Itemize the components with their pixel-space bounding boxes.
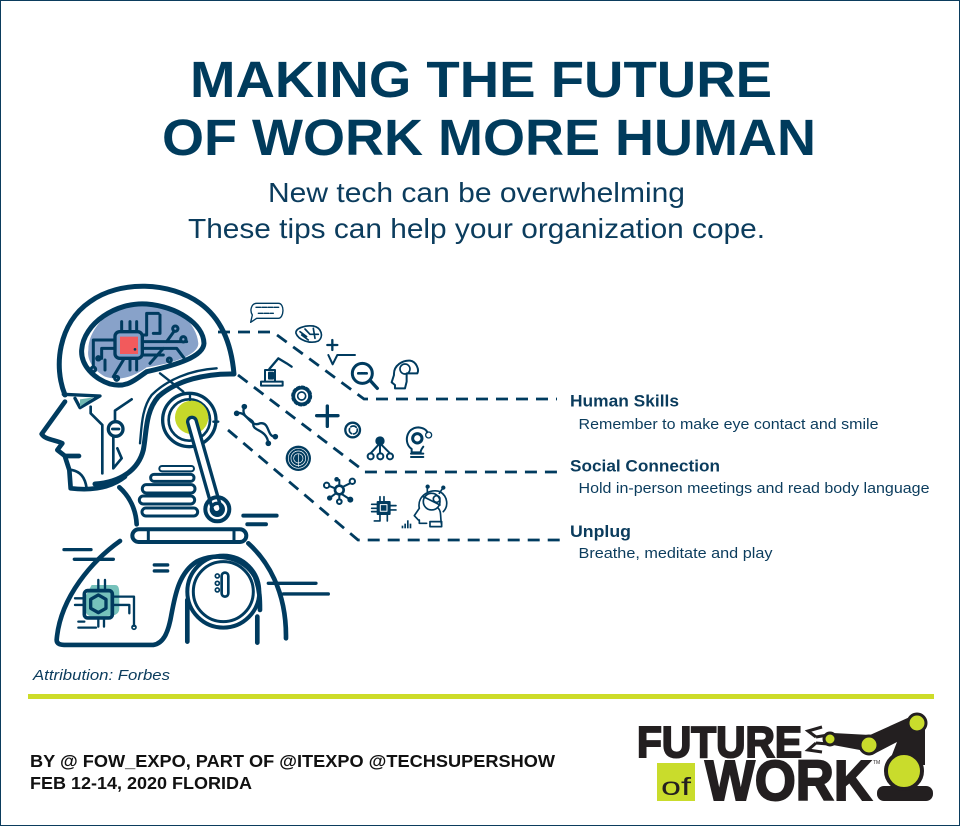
logo: future of work: of [661, 773, 691, 801]
brain panel [82, 302, 204, 385]
icon: robot arm [261, 358, 292, 386]
icon: bar chart [402, 520, 411, 528]
floating tech icons [235, 303, 447, 528]
dashed connector lines [218, 332, 562, 540]
icon: DNA helix [235, 405, 277, 445]
subtitle: New tech can be overwhelming [268, 177, 685, 208]
subtitle [188, 177, 765, 244]
tip: human skills: Remember to make eye contact and smile [578, 416, 878, 433]
shoulder dial [187, 556, 259, 643]
icon: head with brain [392, 361, 418, 388]
icon: magnifier [352, 363, 377, 388]
chest chip [75, 580, 136, 629]
icon: gear [292, 387, 311, 405]
tip: human skills: Human Skills [570, 392, 679, 410]
face profile [42, 402, 125, 489]
logo: future of work: TM [873, 760, 880, 766]
torso [57, 541, 260, 645]
attribution: Attribution: Forbes [32, 667, 171, 684]
title [162, 51, 816, 166]
tip: social connection: Hold in-person meetings and read body language [578, 480, 930, 497]
tip: human skills [570, 392, 878, 433]
tip: unplug: Unplug [570, 523, 631, 541]
icon: plus [317, 406, 338, 426]
circuit details on cheek [91, 399, 132, 473]
logo: robot arm [808, 714, 933, 801]
logo: future of work [637, 714, 933, 813]
tip: social connection: Social Connection [570, 458, 720, 476]
logo: future of work: FUTURE [637, 718, 802, 767]
chip: red core [120, 337, 138, 354]
neck [119, 487, 137, 524]
icon: AI head [414, 485, 447, 527]
green divider [28, 694, 934, 699]
icon: fingerprint [286, 446, 311, 471]
ear joint [160, 373, 218, 447]
icon: hub nodes [324, 478, 355, 504]
title: OF WORK MORE HUMAN [162, 109, 816, 166]
neck ribs [139, 466, 198, 516]
footer credits: BY @ FOW_EXPO, PART OF @ITEXPO @TECHSUPERSHOW [30, 751, 555, 771]
footer credits: FEB 12-14, 2020 FLORIDA [30, 773, 252, 793]
subtitle: These tips can help your organization cope. [188, 213, 765, 244]
title: MAKING THE FUTURE [190, 51, 772, 108]
icon: light bulb with gears [407, 427, 432, 457]
icon: network tree [368, 437, 393, 459]
tip: unplug [570, 523, 773, 562]
helmet outline [59, 286, 234, 484]
tip: unplug: Breathe, meditate and play [578, 545, 773, 562]
footer credits [30, 751, 555, 793]
tip: social connection [570, 458, 930, 497]
icon: brain [296, 326, 321, 342]
icon: speech bubble [251, 303, 283, 322]
icon: plus and check [327, 340, 355, 364]
arm rod [192, 422, 229, 521]
logo: future of work: WORK [705, 749, 872, 813]
illustration: robot head and torso [42, 286, 328, 645]
icon: processor chip [372, 497, 396, 521]
icon: ring [345, 423, 360, 437]
collar [132, 529, 246, 542]
